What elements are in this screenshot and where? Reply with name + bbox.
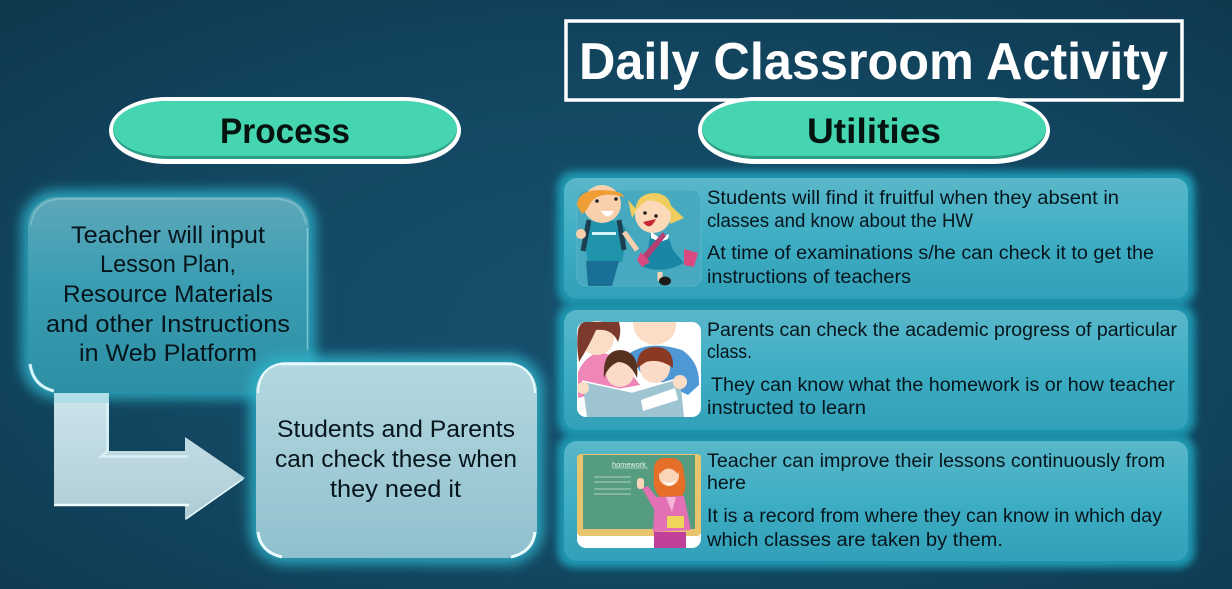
text: teacher: It is a record from where they can know in which day [707,506,1163,527]
process box: students and parents [249,355,544,565]
text: students: classes and know about the HW [707,211,973,232]
panel: students utility [557,171,1195,306]
text: students: Students will find it fruitful when they absent in [707,188,1119,209]
text: teacher [706,451,1165,551]
arrow: bent arrow from teacher box to students box [54,393,245,520]
process box: teacher input [21,190,316,399]
text: parents: instructed to learn [707,398,866,419]
icon: boy and girl students [576,185,701,286]
text: parents [707,320,1178,419]
process box: teacher input: Resource Materials [63,281,273,308]
heading pill: process [109,97,461,164]
text: parents: class. [707,342,752,363]
process box: teacher input: and other Instructions [46,311,290,338]
process box: students and parents: Students and Parents [277,416,515,443]
text: teacher: which classes are taken by them. [706,530,1003,551]
panel: parents utility [557,303,1195,437]
text: parents: They can know what the homework is or how teacher [711,375,1176,396]
text: students: At time of examinations s/he can check it to get the [707,243,1154,264]
process box: students and parents: they need it [330,476,461,503]
title box: Daily Classroom Activity [579,33,1168,91]
heading pill: utilities: Utilities [807,112,941,151]
heading pill: process: Process [220,112,350,151]
process box: students and parents: can check these when [275,446,517,473]
heading pill: utilities [698,97,1050,164]
process box: teacher input: in Web Platform [79,340,257,367]
icon: teacher at blackboard: homework [612,462,647,469]
text: teacher: here [707,473,746,494]
process box: teacher input: Lesson Plan, [100,251,236,278]
icon: parents reading with children [577,321,701,417]
panel: teacher utility [557,434,1195,568]
process box: teacher input: Teacher will input [71,222,265,249]
icon: teacher at blackboard [577,454,701,548]
text: students [707,188,1154,288]
text: parents: Parents can check the academic progress of particular [707,320,1178,341]
text: students: instructions of teachers [707,267,911,288]
text: teacher: Teacher can improve their lessons continuously from [707,451,1165,472]
